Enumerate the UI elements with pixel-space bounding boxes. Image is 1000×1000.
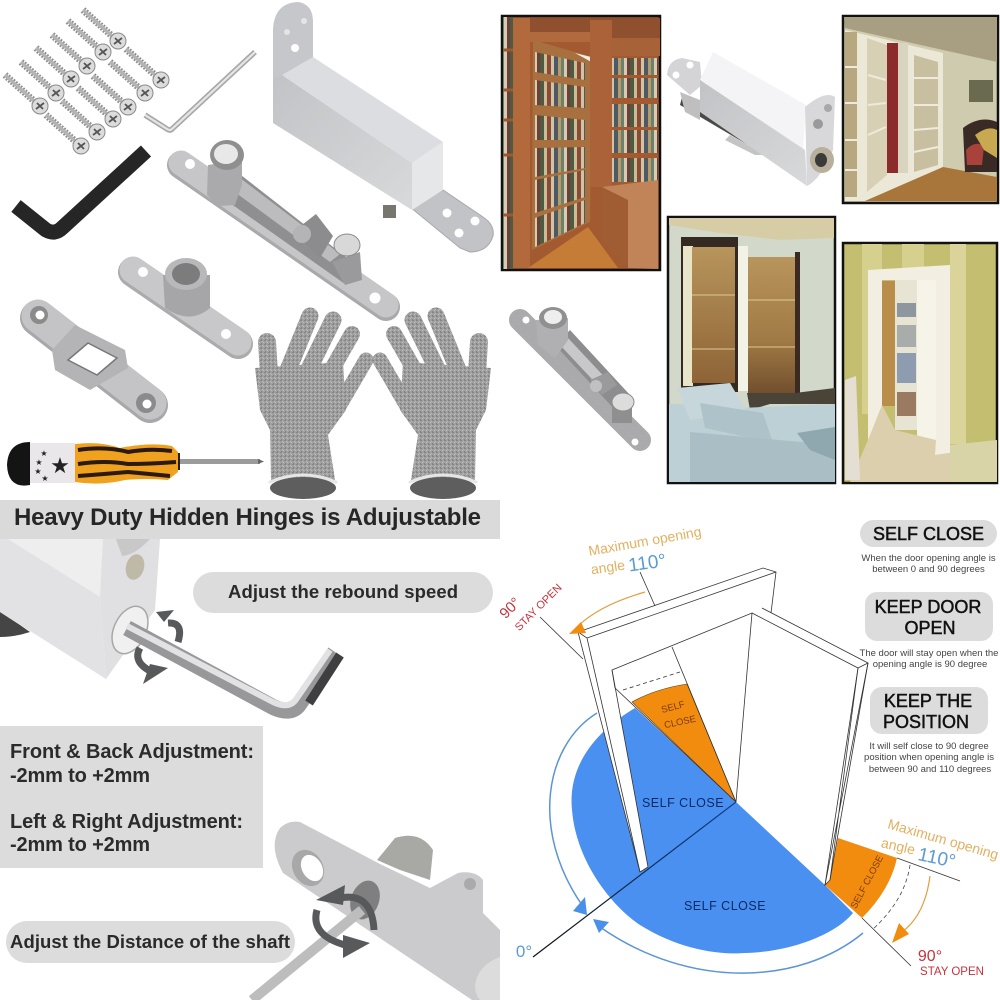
- heading bar: Heavy Duty Hidden Hinges is Adujustable: [14, 504, 481, 531]
- pill: adjust the rebound speed: Adjust the rebound speed: [228, 581, 458, 602]
- legend: self close: [860, 520, 997, 575]
- hinge body with foot plate: [273, 2, 493, 252]
- top maximum opening label: 110°: [627, 550, 667, 577]
- legend: keep door open: opening angle is 90 degree: [873, 659, 987, 670]
- legend: keep door open: [860, 592, 998, 670]
- right stay open label: 90°: [918, 948, 942, 965]
- leader lines: [540, 572, 960, 966]
- top stay open label: 90°: [496, 594, 524, 622]
- legend: keep the position: KEEP THE: [884, 691, 972, 711]
- cut resistant gloves: [255, 316, 491, 499]
- adjustment ranges box: Left & Right Adjustment:: [10, 811, 243, 833]
- legend: keep the position: position when opening angle is: [864, 752, 994, 763]
- right stay open label: STAY OPEN: [920, 966, 984, 978]
- gold arc arrow right: [892, 876, 930, 943]
- screwdriver: ★: [50, 453, 70, 478]
- adjustment ranges box: -2mm to +2mm: [10, 765, 150, 787]
- blue arc arrow bottom: [593, 919, 863, 973]
- hex key in adjuster: [127, 626, 340, 711]
- screws set: [5, 10, 169, 154]
- zero degree line: [533, 802, 736, 957]
- orange sector labels: CLOSE: [663, 714, 697, 731]
- screwdriver: ★: [40, 449, 48, 458]
- screwdriver: ★: [35, 458, 43, 467]
- silver hinge product view: [667, 52, 835, 186]
- legend: self close: between 0 and 90 degrees: [872, 564, 985, 575]
- socket plate: [133, 258, 238, 344]
- black hex key: [16, 151, 146, 232]
- legend: keep door open: KEEP DOOR: [875, 597, 981, 617]
- top maximum opening label: [587, 523, 703, 577]
- bracket with window: [30, 306, 156, 413]
- legend: keep the position: It will self close to 90 degree: [869, 741, 989, 752]
- orange sector labels: SELF CLOSE: [849, 854, 886, 911]
- blue self close sector: [572, 708, 853, 953]
- screwdriver: ★: [34, 467, 42, 476]
- pill: adjust the rebound speed: [193, 572, 493, 613]
- legend: keep the position: POSITION: [883, 712, 969, 732]
- sector labels: [642, 796, 766, 913]
- rotation arrows: shaft adjuster: [316, 885, 374, 958]
- hinge block close-up: [0, 539, 160, 679]
- orange sector lower: [825, 838, 897, 918]
- gold arc arrow top: [569, 592, 645, 634]
- dashed guide lower: [872, 865, 910, 930]
- orange sector upper: [632, 684, 736, 802]
- door frame: [578, 568, 776, 872]
- photo: hidden bookcase door striped wall: [843, 243, 997, 483]
- legend: keep door open: The door will stay open when the: [860, 648, 998, 659]
- orange sector labels: SELF: [660, 699, 686, 716]
- dashed guide upper: [623, 672, 680, 690]
- small silver hex key: [145, 52, 255, 130]
- legend: self close: When the door opening angle is: [861, 553, 996, 564]
- top maximum opening label: Maximum opening: [587, 523, 703, 559]
- adjustment ranges box: -2mm to +2mm: [10, 834, 150, 856]
- orange sector labels: [660, 699, 886, 911]
- right stay open label: [918, 948, 984, 978]
- top stay open label: STAY OPEN: [513, 582, 565, 634]
- sector labels: SELF CLOSE: [642, 796, 724, 810]
- blue arc arrow left: [550, 713, 597, 915]
- screwdriver: ★: [41, 474, 49, 483]
- right maximum opening label: 110°: [916, 844, 957, 873]
- door swing diagram: [496, 523, 1000, 978]
- door leaf right edge: [825, 663, 868, 885]
- pivot plate with arm: [181, 140, 386, 307]
- top maximum opening label: angle: [590, 557, 626, 577]
- adjustment ranges box: [0, 726, 263, 868]
- screwdriver: [7, 442, 264, 486]
- screwdriver shaft: [252, 910, 362, 1000]
- legend: keep the position: between 90 and 110 degrees: [869, 764, 991, 775]
- adjustment ranges box: Front & Back Adjustment:: [10, 741, 254, 763]
- open door: [752, 608, 868, 885]
- right maximum opening label: angle: [880, 834, 917, 858]
- photo: bookcase door: [502, 16, 660, 270]
- pivot plate close-up: [275, 822, 500, 1000]
- photo: wood pivot doors living room: [668, 217, 835, 483]
- frame inner lines: [578, 572, 776, 872]
- sector labels: SELF CLOSE: [684, 899, 766, 913]
- legend: keep door open: OPEN: [904, 618, 956, 638]
- right maximum opening label: Maximum opening: [886, 816, 1000, 862]
- zero degree label: 0°: [516, 942, 532, 961]
- legend: self close: SELF CLOSE: [873, 524, 984, 544]
- pill: adjust the distance of the shaft: Adjust the Distance of the shaft: [10, 931, 290, 952]
- legend: keep the position: [864, 687, 994, 775]
- rotation arrows: rebound adjuster: [138, 610, 180, 684]
- pill: adjust the distance of the shaft: [6, 921, 295, 963]
- heading bar: [0, 500, 500, 539]
- photo: open bookcase room: [843, 16, 998, 203]
- small pivot plate product view: [520, 307, 640, 446]
